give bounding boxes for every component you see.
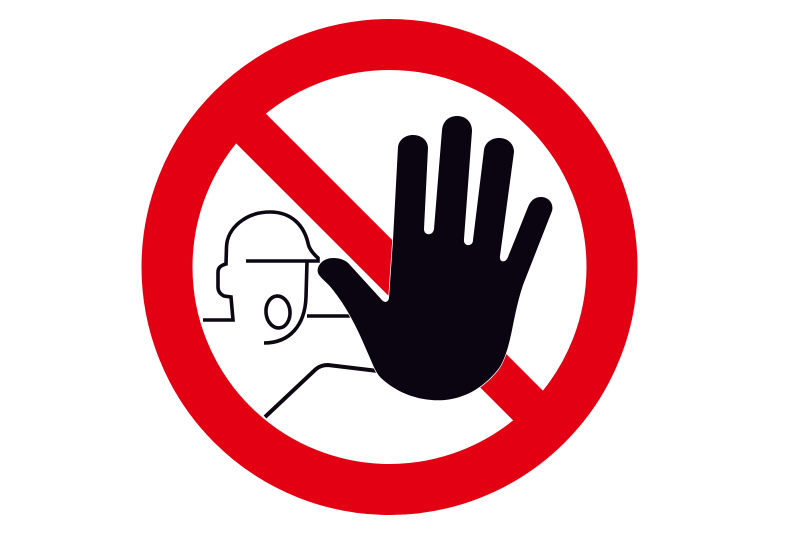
face and chin line	[264, 262, 307, 343]
helmet and head outline	[203, 212, 318, 320]
red diagonal bar	[250, 128, 529, 406]
icon: worker with hard hat	[203, 212, 378, 417]
arm line	[265, 365, 378, 417]
icon: raised black hand	[318, 116, 552, 400]
shoulder line	[307, 314, 350, 318]
open mouth	[265, 295, 291, 329]
red prohibition ring	[167, 44, 612, 490]
